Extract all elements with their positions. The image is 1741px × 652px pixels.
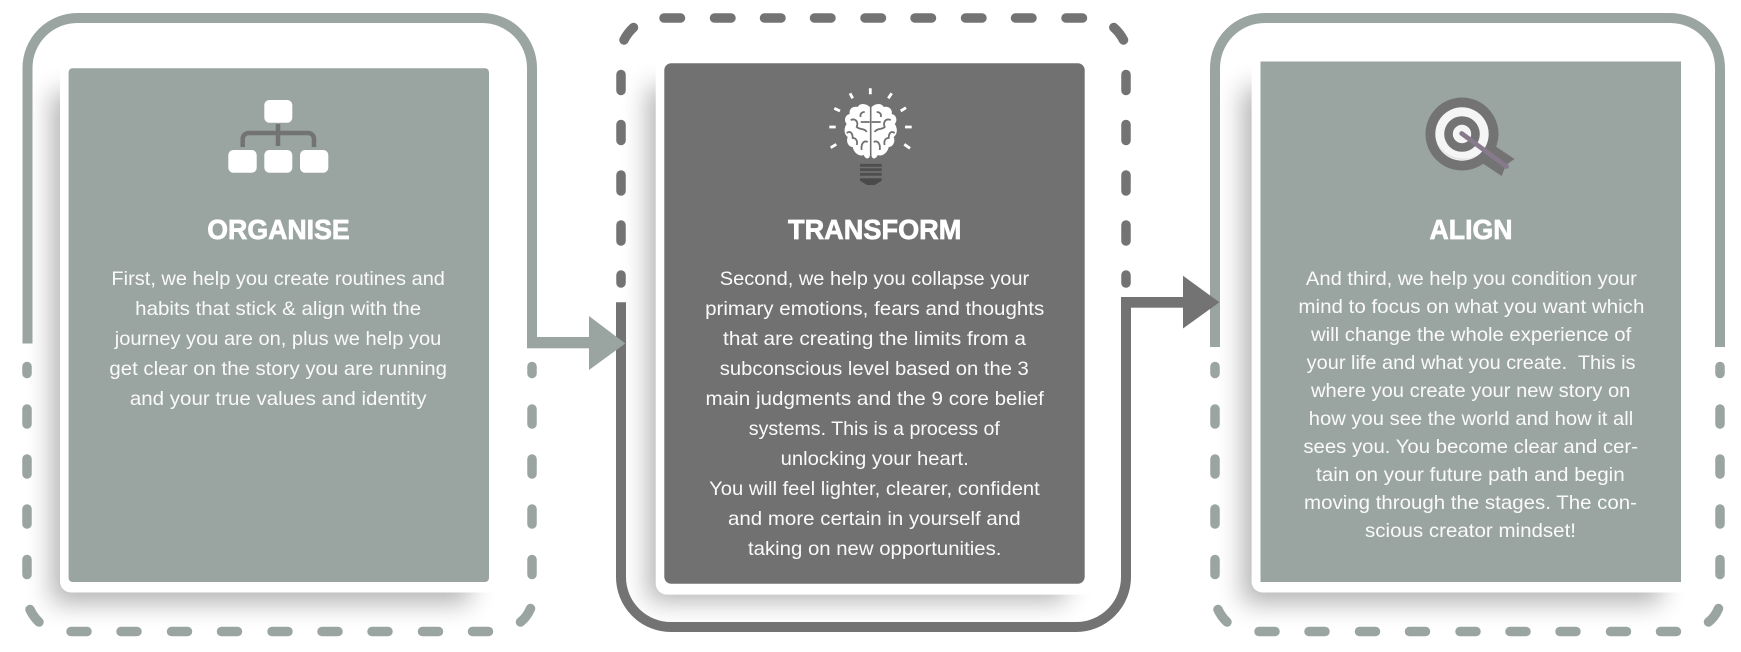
text block: transform: subconscious level based on the 3 <box>720 358 1029 380</box>
text block: align: scious creator mindset! <box>1365 520 1576 542</box>
text block: align: mind to focus on what you want which <box>1298 296 1644 318</box>
text block: organise <box>109 268 447 410</box>
icon: target with arrow <box>1426 98 1514 176</box>
text block: align <box>1298 268 1644 542</box>
text block: transform: taking on new opportunities. <box>748 538 1001 560</box>
card shadow: organise <box>52 92 470 603</box>
white card: organise <box>60 58 498 592</box>
text block: transform <box>705 268 1045 560</box>
text block: organise: habits that stick & align with the <box>135 298 421 320</box>
heading: align: ALIGN <box>1430 214 1512 245</box>
text block: align: will change the whole experience of <box>1310 324 1632 346</box>
arrow: transform to align <box>1121 276 1219 328</box>
arrow: organise to transform <box>527 316 625 370</box>
text block: align: sees you. You become clear and cer- <box>1303 436 1638 458</box>
card shadow: align <box>1243 88 1661 603</box>
panel: align <box>1215 18 1720 632</box>
text block: organise: get clear on the story you are running <box>109 358 447 380</box>
panel: transform <box>621 18 1126 627</box>
text block: align: tain on your future path and begin <box>1316 464 1625 486</box>
icon: brain light bulb <box>829 88 912 185</box>
colour card: organise <box>69 68 489 582</box>
text block: transform: primary emotions, fears and thoughts <box>705 298 1045 320</box>
frame: transform <box>621 18 1126 627</box>
text block: transform: that are creating the limits from a <box>723 328 1026 350</box>
text block: transform: systems. This is a process of <box>749 418 1000 440</box>
heading: organise: ORGANISE <box>207 214 350 245</box>
text block: align: moving through the stages. The con- <box>1304 492 1637 514</box>
text block: transform: You will feel lighter, clearer, confident <box>709 478 1040 500</box>
colour card: align <box>1260 62 1681 582</box>
colour card: transform <box>664 63 1085 584</box>
frame: organise <box>27 18 532 632</box>
text block: transform: Second, we help you collapse your <box>720 268 1030 290</box>
text block: organise: First, we help you create routines and <box>111 268 445 290</box>
text block: align: And third, we help you condition your <box>1306 268 1637 290</box>
text block: transform: unlocking your heart. <box>781 448 969 470</box>
text block: organise: journey you are on, plus we help you <box>114 328 441 350</box>
white card: transform <box>656 52 1094 595</box>
frame: align <box>1215 18 1720 632</box>
text block: transform: main judgments and the 9 core belief <box>706 388 1045 410</box>
text block: organise: and your true values and identity <box>130 388 427 410</box>
heading: transform: TRANSFORM <box>788 214 961 245</box>
white card: align <box>1252 51 1690 592</box>
panel: organise <box>27 18 532 632</box>
text block: align: how you see the world and how it all <box>1309 408 1633 430</box>
icon: hierarchy <box>228 100 328 173</box>
text block: align: your life and what you create. This is <box>1307 352 1636 374</box>
text block: transform: and more certain in yourself and <box>728 508 1021 530</box>
text block: align: where you create your new story on <box>1310 380 1630 402</box>
card shadow: transform <box>648 87 1066 601</box>
